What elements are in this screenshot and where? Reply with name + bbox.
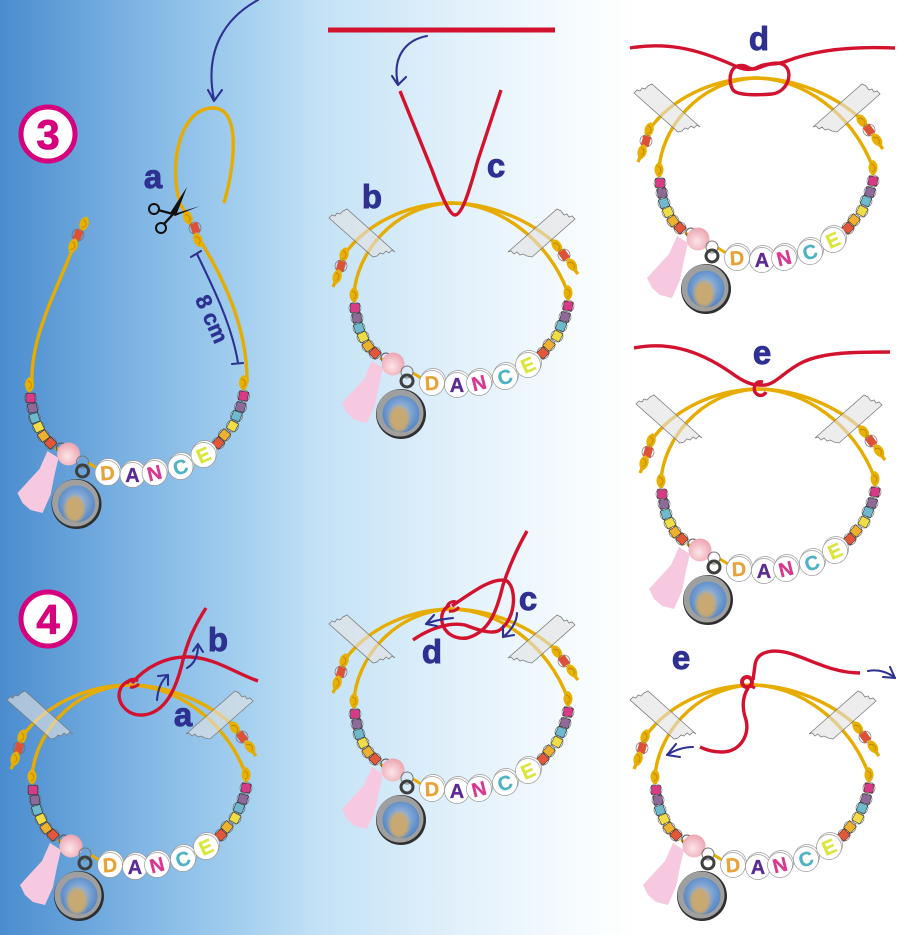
label e: e bbox=[753, 334, 771, 371]
arrow down bbox=[503, 613, 517, 637]
bracelet: C bbox=[495, 771, 516, 797]
arrow right bbox=[868, 667, 895, 678]
red cord crossing loop bbox=[119, 608, 258, 715]
step 3 number badge bbox=[21, 107, 75, 161]
panel: step 3 right middle bbox=[634, 334, 890, 625]
red cord with loose double loop bbox=[630, 46, 895, 95]
arrow left bbox=[667, 744, 693, 757]
label c: c bbox=[519, 580, 537, 617]
bracelet: D bbox=[424, 779, 440, 801]
label c: c bbox=[487, 147, 505, 184]
bracelet: N bbox=[470, 778, 489, 802]
bracelet: E bbox=[518, 759, 539, 785]
bracelet: C bbox=[495, 365, 516, 391]
bracelet: A bbox=[450, 375, 464, 397]
label a: a bbox=[144, 158, 163, 195]
label d: d bbox=[749, 20, 769, 57]
arrow upward bbox=[187, 644, 203, 668]
bracelet beads: D bbox=[100, 463, 115, 485]
bracelet beads: A bbox=[125, 465, 140, 487]
bracelet beads: C bbox=[171, 455, 191, 481]
bracelet bbox=[7, 685, 258, 921]
bracelet beads: E bbox=[193, 443, 214, 469]
panel: step 3 right top bbox=[630, 20, 895, 314]
curved arrow into the loop bbox=[208, 0, 258, 101]
arrow left bbox=[426, 615, 453, 626]
bracelet: A bbox=[751, 857, 765, 879]
bracelet: E bbox=[823, 228, 844, 254]
panel: step 4 middle bbox=[329, 531, 580, 845]
step 4 number badge: 4 bbox=[36, 596, 60, 643]
label a: a bbox=[174, 696, 193, 733]
measurement label: 8 cm bbox=[190, 291, 233, 347]
bracelet: D bbox=[731, 559, 747, 581]
bracelet: C bbox=[796, 847, 817, 873]
bracelet: N bbox=[775, 247, 794, 271]
label e: e bbox=[672, 639, 690, 676]
bracelet: A bbox=[757, 561, 771, 583]
bracelet: D bbox=[102, 855, 118, 877]
step 3 number badge: 3 bbox=[36, 111, 60, 158]
bracelet: N bbox=[148, 854, 167, 878]
bracelet: C bbox=[802, 551, 823, 577]
bracelet: E bbox=[518, 353, 539, 379]
label b: b bbox=[362, 178, 382, 215]
step 4 number badge bbox=[21, 592, 75, 646]
icon: scissors bbox=[149, 187, 200, 233]
panel: step 4 left bbox=[7, 608, 258, 921]
bracelet bbox=[636, 389, 887, 625]
bracelet: D bbox=[725, 855, 741, 877]
bracelet: E bbox=[825, 539, 846, 565]
bracelet: C bbox=[173, 847, 194, 873]
cord loop with knots and cut end bbox=[32, 108, 247, 385]
bracelet bbox=[634, 78, 885, 314]
measurement bracket bbox=[191, 251, 243, 364]
red V cord bbox=[400, 90, 501, 215]
bracelet: C bbox=[800, 240, 821, 266]
panel: step 4 right bbox=[630, 639, 895, 921]
bracelet: A bbox=[450, 781, 464, 803]
bracelet beads bbox=[18, 375, 250, 529]
panel: step 3 middle bbox=[328, 30, 580, 439]
bracelet: A bbox=[128, 857, 142, 879]
label b: b bbox=[208, 621, 228, 658]
bracelet bbox=[329, 609, 580, 845]
bracelet bbox=[329, 203, 580, 439]
arrow through loop bbox=[157, 675, 168, 700]
arrow down to V bbox=[392, 36, 427, 85]
bracelet: D bbox=[424, 373, 440, 395]
bracelet: N bbox=[771, 854, 790, 878]
bracelet: E bbox=[819, 835, 840, 861]
panel: step 3 cut the cord bbox=[18, 0, 258, 529]
bracelet beads: N bbox=[145, 462, 164, 486]
bracelet: D bbox=[729, 248, 745, 270]
red cord double loop bbox=[413, 531, 527, 640]
bracelet bbox=[630, 685, 881, 921]
bracelet: E bbox=[196, 835, 217, 861]
red cord with tight knot bbox=[634, 346, 890, 395]
bracelet: N bbox=[470, 372, 489, 396]
label d: d bbox=[422, 633, 442, 670]
bracelet: A bbox=[755, 250, 769, 272]
bracelet: N bbox=[777, 558, 796, 582]
red cord pulled tight bbox=[700, 651, 860, 752]
red cord straight bbox=[328, 28, 555, 32]
